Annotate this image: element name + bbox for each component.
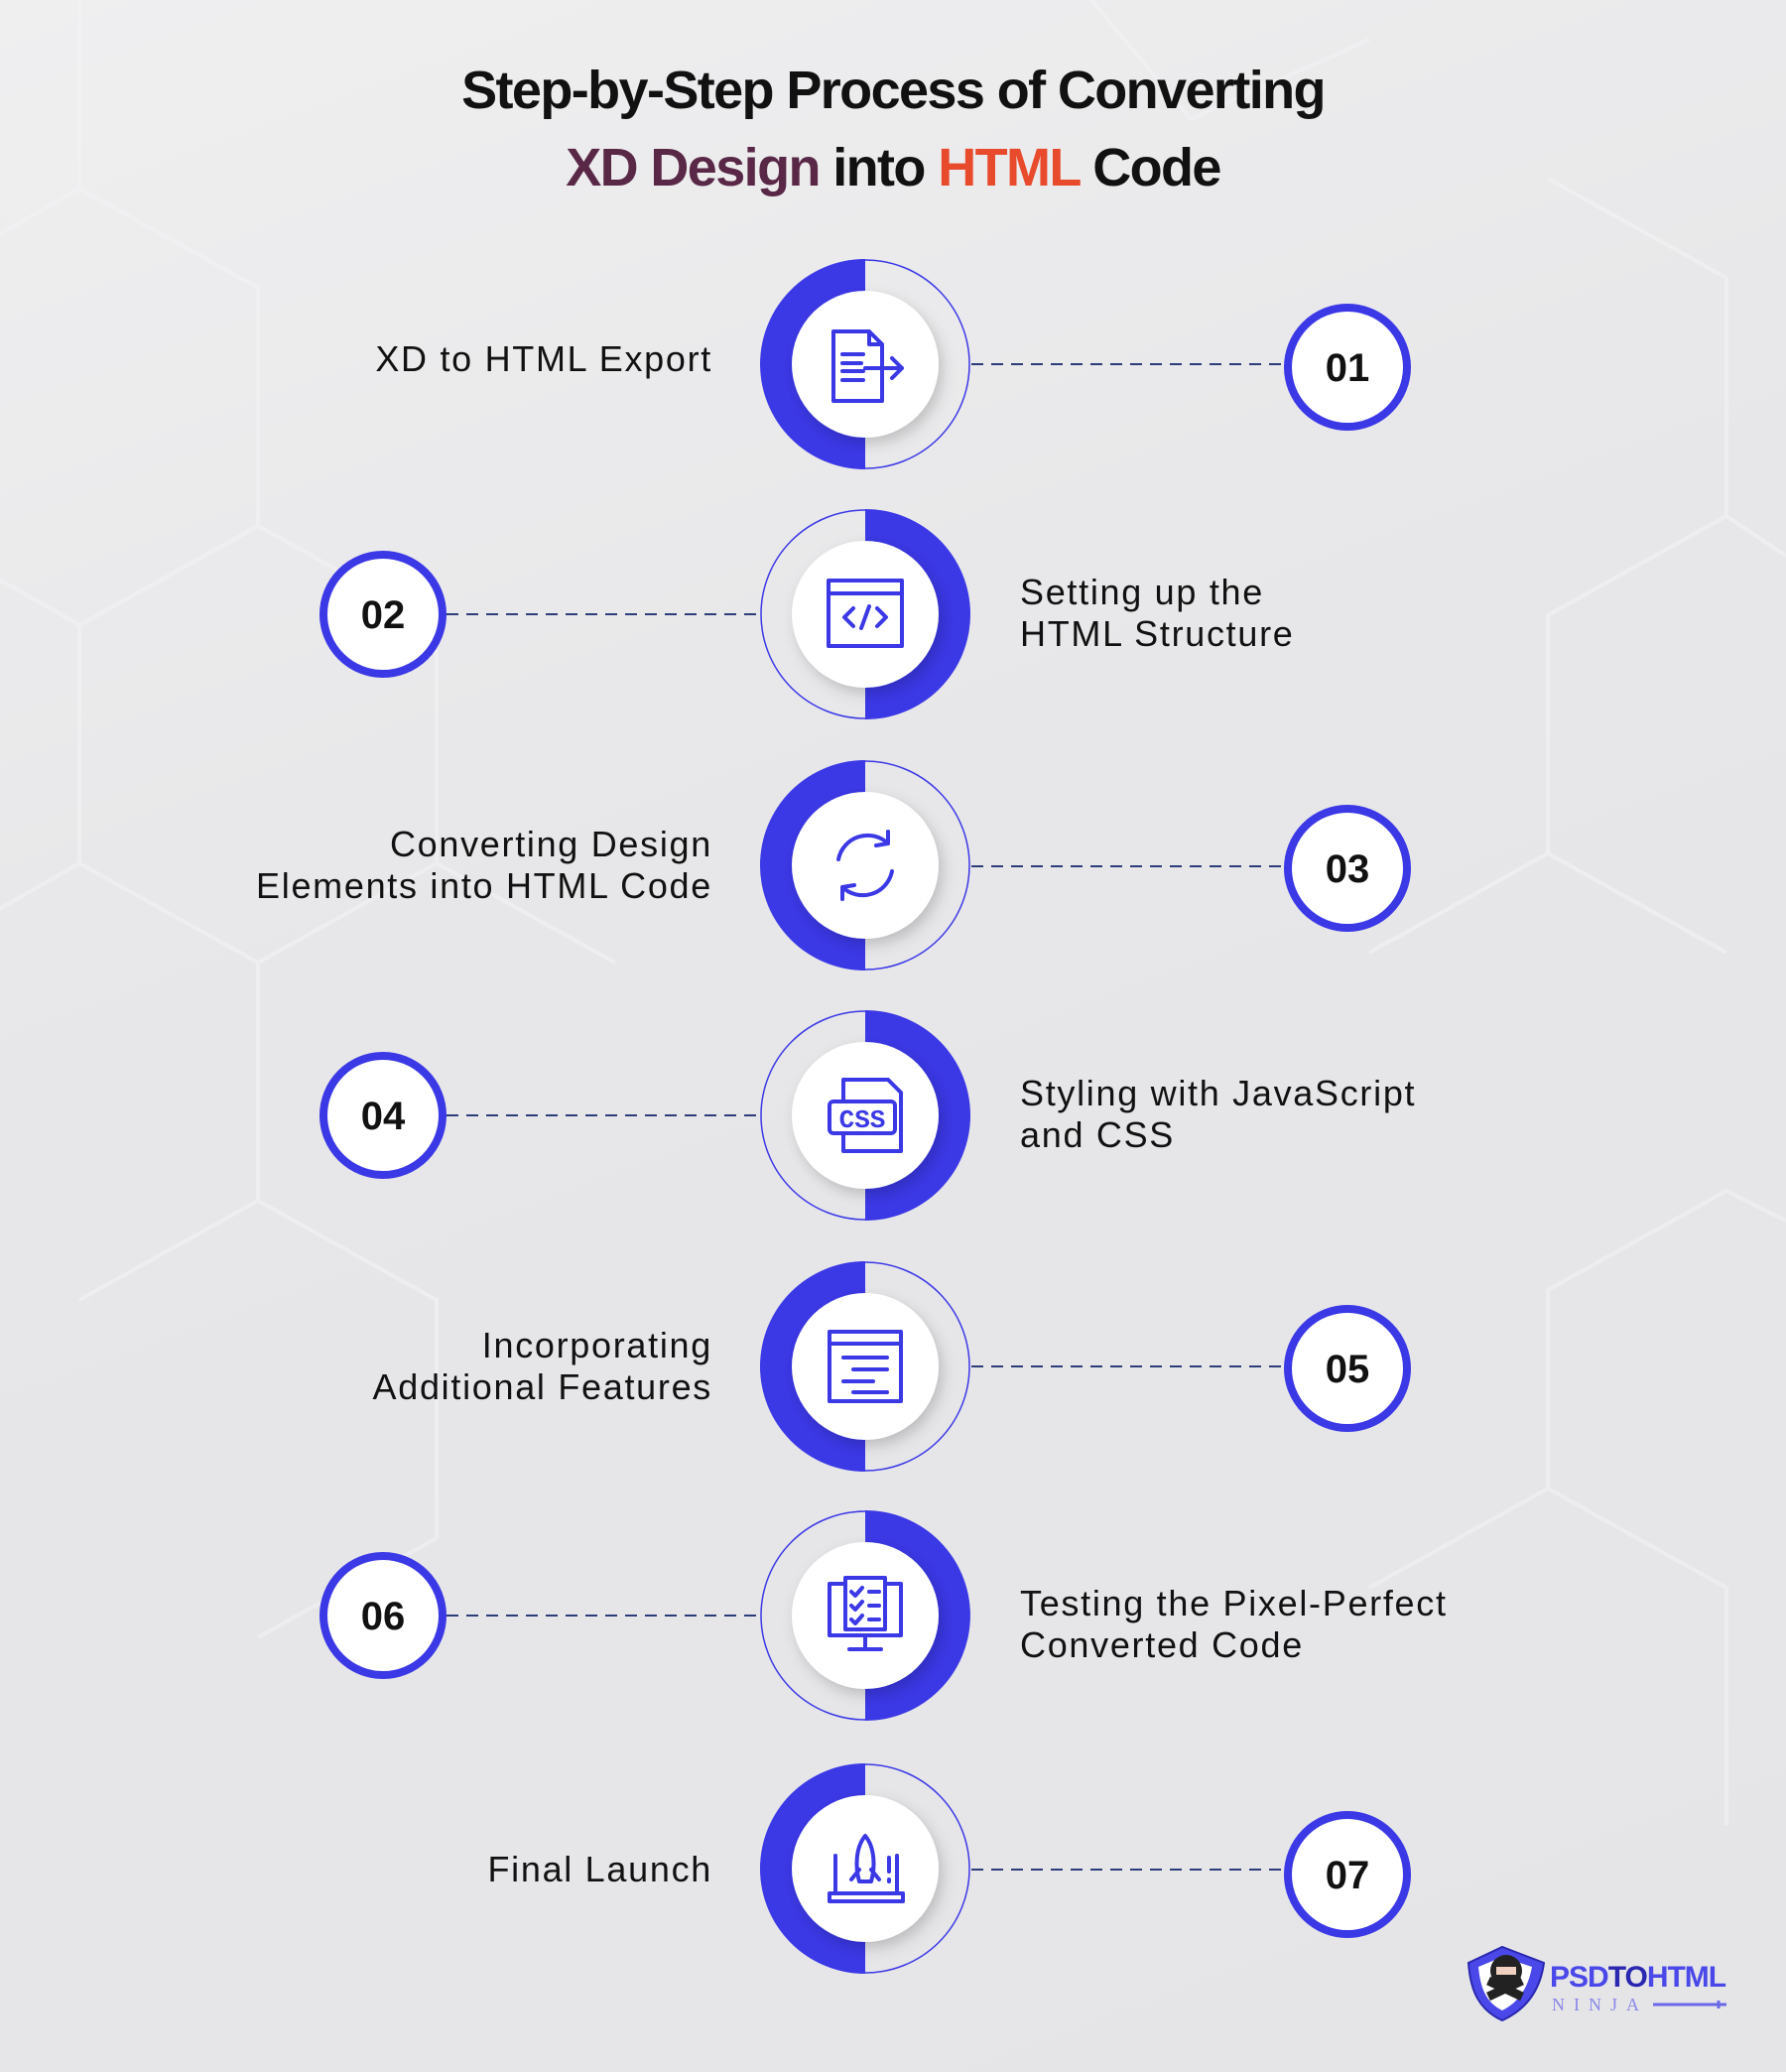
title: Step-by-Step Process of Converting: [461, 61, 1325, 120]
label 6: Converted Code: [1020, 1624, 1304, 1665]
step 1: [760, 259, 1407, 469]
label 1: XD to HTML Export: [375, 338, 712, 379]
label 2: Setting up the: [1020, 572, 1264, 612]
label 7: Final Launch: [487, 1849, 712, 1889]
label 2: [1020, 572, 1295, 654]
step 2: 02: [361, 593, 405, 637]
label 4: and CSS: [1020, 1114, 1175, 1155]
label 2: HTML Structure: [1020, 613, 1295, 654]
step 2: [323, 509, 970, 719]
step 3: [760, 760, 1407, 971]
step 5: [760, 1261, 1407, 1472]
step 6: [323, 1510, 970, 1721]
step 4: [323, 1010, 970, 1221]
label 4: [1020, 1073, 1416, 1155]
label 5: [373, 1325, 712, 1407]
label 6: Testing the Pixel-Perfect: [1020, 1583, 1448, 1623]
logo: [1467, 1945, 1726, 2022]
label 5: Incorporating: [482, 1325, 712, 1365]
label 3: Converting Design: [390, 824, 712, 864]
step 3: 03: [1326, 847, 1369, 891]
title: [461, 61, 1325, 197]
step 7: 07: [1326, 1854, 1369, 1897]
logo: NINJA: [1552, 1995, 1648, 2014]
label 4: Styling with JavaScript: [1020, 1073, 1416, 1113]
step 5: 05: [1326, 1348, 1369, 1391]
logo: PSDTOHTML: [1550, 1961, 1726, 1994]
step 6: 06: [361, 1595, 405, 1638]
step 4: 04: [361, 1095, 406, 1138]
label 3: [256, 824, 712, 906]
step 7: [760, 1763, 1407, 1974]
label 3: Elements into HTML Code: [256, 865, 712, 906]
step 4: CSS: [839, 1105, 885, 1135]
title: XD Design into HTML Code: [566, 138, 1220, 197]
label 5: Additional Features: [373, 1366, 712, 1407]
label 6: [1020, 1583, 1448, 1665]
step 1: 01: [1326, 346, 1369, 390]
